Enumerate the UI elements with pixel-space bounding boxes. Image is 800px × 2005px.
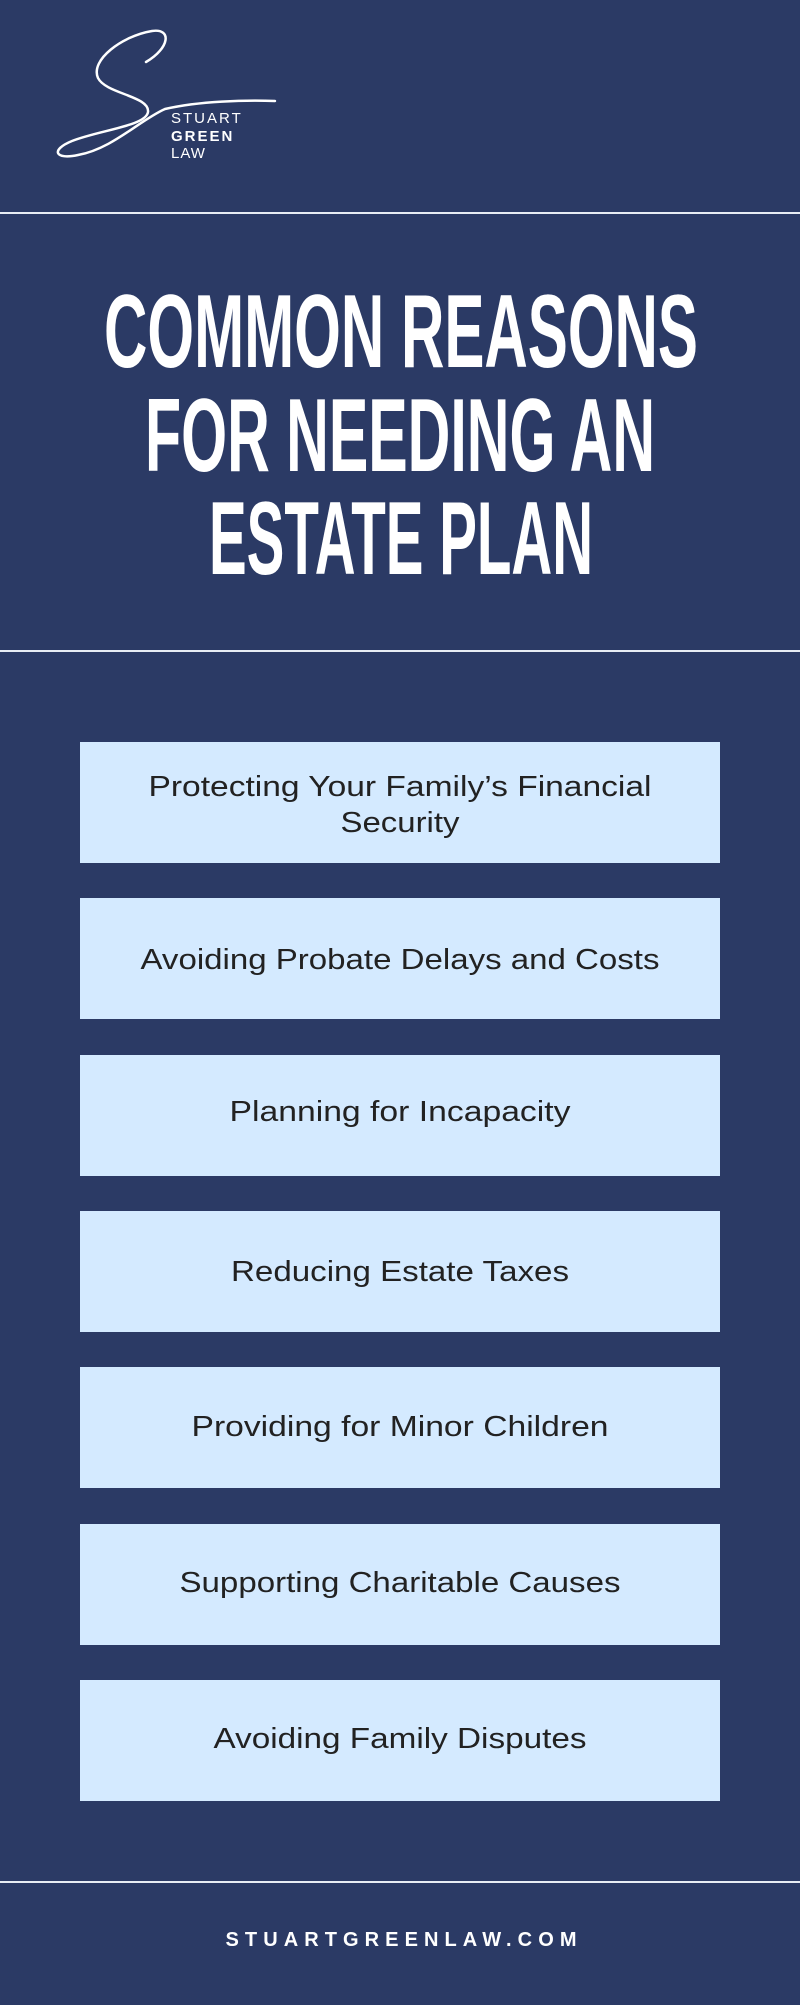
item 2: Avoiding Probate Delays and Costs <box>140 944 660 976</box>
logo: LAW <box>171 145 206 162</box>
item 7 <box>80 1680 720 1801</box>
item 1: Protecting Your Family’s Financial <box>148 771 652 803</box>
logo: GREEN <box>171 128 234 145</box>
item 5 <box>80 1367 720 1488</box>
item 1: Security <box>340 807 460 839</box>
logo <box>58 31 275 162</box>
item 6: Supporting Charitable Causes <box>180 1567 620 1599</box>
item 7: Avoiding Family Disputes <box>214 1723 586 1755</box>
item 5: Providing for Minor Children <box>192 1411 608 1443</box>
item 3 <box>80 1055 720 1176</box>
logo: STUART <box>171 110 243 127</box>
footer url: STUARTGREENLAW.COM <box>226 1929 576 1951</box>
title <box>104 274 698 597</box>
item 1 <box>80 742 720 863</box>
item 2 <box>80 898 720 1019</box>
item 4 <box>80 1211 720 1332</box>
item 4: Reducing Estate Taxes <box>231 1256 569 1288</box>
item 3: Planning for Incapacity <box>230 1096 571 1128</box>
item 6 <box>80 1524 720 1645</box>
